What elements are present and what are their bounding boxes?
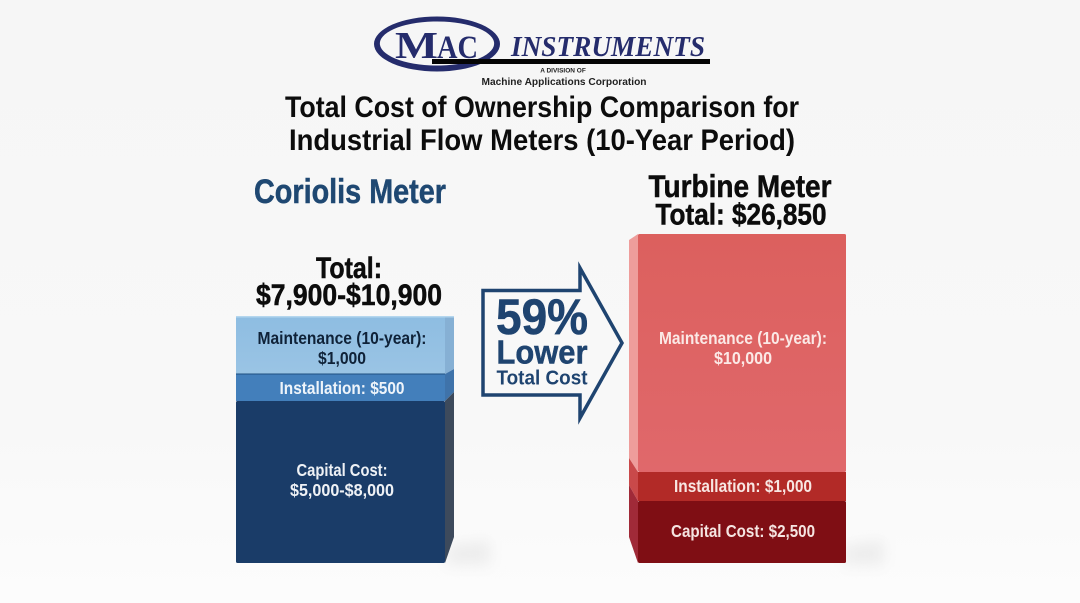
title: Industrial Flow Meters (10-Year Period)	[289, 124, 795, 157]
logo corporation line: Machine Applications Corporation	[482, 76, 646, 88]
segment: maintenance: Maintenance (10-year):	[659, 328, 827, 348]
logo AC lettering: AC	[437, 30, 478, 66]
stacked block: Coriolis Meter	[236, 316, 454, 563]
callout 59%: 59%	[496, 289, 588, 345]
segment: capital cost: $5,000-$8,000	[290, 480, 394, 500]
segment: capital cost	[629, 485, 846, 563]
segment: installation: Installation: $1,000	[674, 476, 812, 496]
stacked block: Turbine Meter	[629, 234, 846, 563]
segment: maintenance	[629, 234, 846, 472]
logo M lettering: M	[395, 25, 438, 67]
segment: maintenance	[236, 316, 454, 374]
callout Total Cost: Total Cost	[496, 368, 588, 390]
segment: installation	[236, 369, 454, 401]
segment: installation: Installation: $500	[280, 378, 405, 398]
title	[285, 91, 799, 157]
heading: Turbine Meter total: Total: $26,850	[656, 198, 826, 232]
heading: Coriolis total	[256, 252, 442, 312]
arrow callout: 59% lower total cost	[483, 268, 622, 418]
segment: capital cost	[236, 392, 454, 563]
heading: Coriolis total: Total:	[316, 252, 382, 285]
logo ellipse	[374, 16, 500, 71]
arrow outline	[483, 268, 622, 418]
segment: maintenance: $10,000	[714, 348, 772, 368]
segment: capital cost: Capital Cost: $2,500	[671, 521, 815, 541]
heading: Coriolis total: $7,900-$10,900	[256, 279, 442, 312]
logo rule	[432, 59, 710, 64]
segment: maintenance: $1,000	[318, 348, 366, 368]
segment: maintenance: Maintenance (10-year):	[258, 328, 426, 348]
heading: Coriolis Meter: Coriolis Meter	[254, 173, 446, 211]
segment: installation	[629, 458, 846, 501]
logo INSTRUMENTS: INSTRUMENTS	[510, 31, 705, 63]
title: Total Cost of Ownership Comparison for	[285, 91, 799, 124]
callout Lower: Lower	[496, 334, 588, 370]
logo: MAC Instruments	[374, 16, 710, 88]
heading: Turbine Meter total	[648, 168, 832, 232]
heading: Turbine Meter total: Turbine Meter	[648, 168, 832, 204]
logo division line: A DIVISION OF	[540, 68, 586, 74]
segment: capital cost: Capital Cost:	[296, 460, 388, 480]
